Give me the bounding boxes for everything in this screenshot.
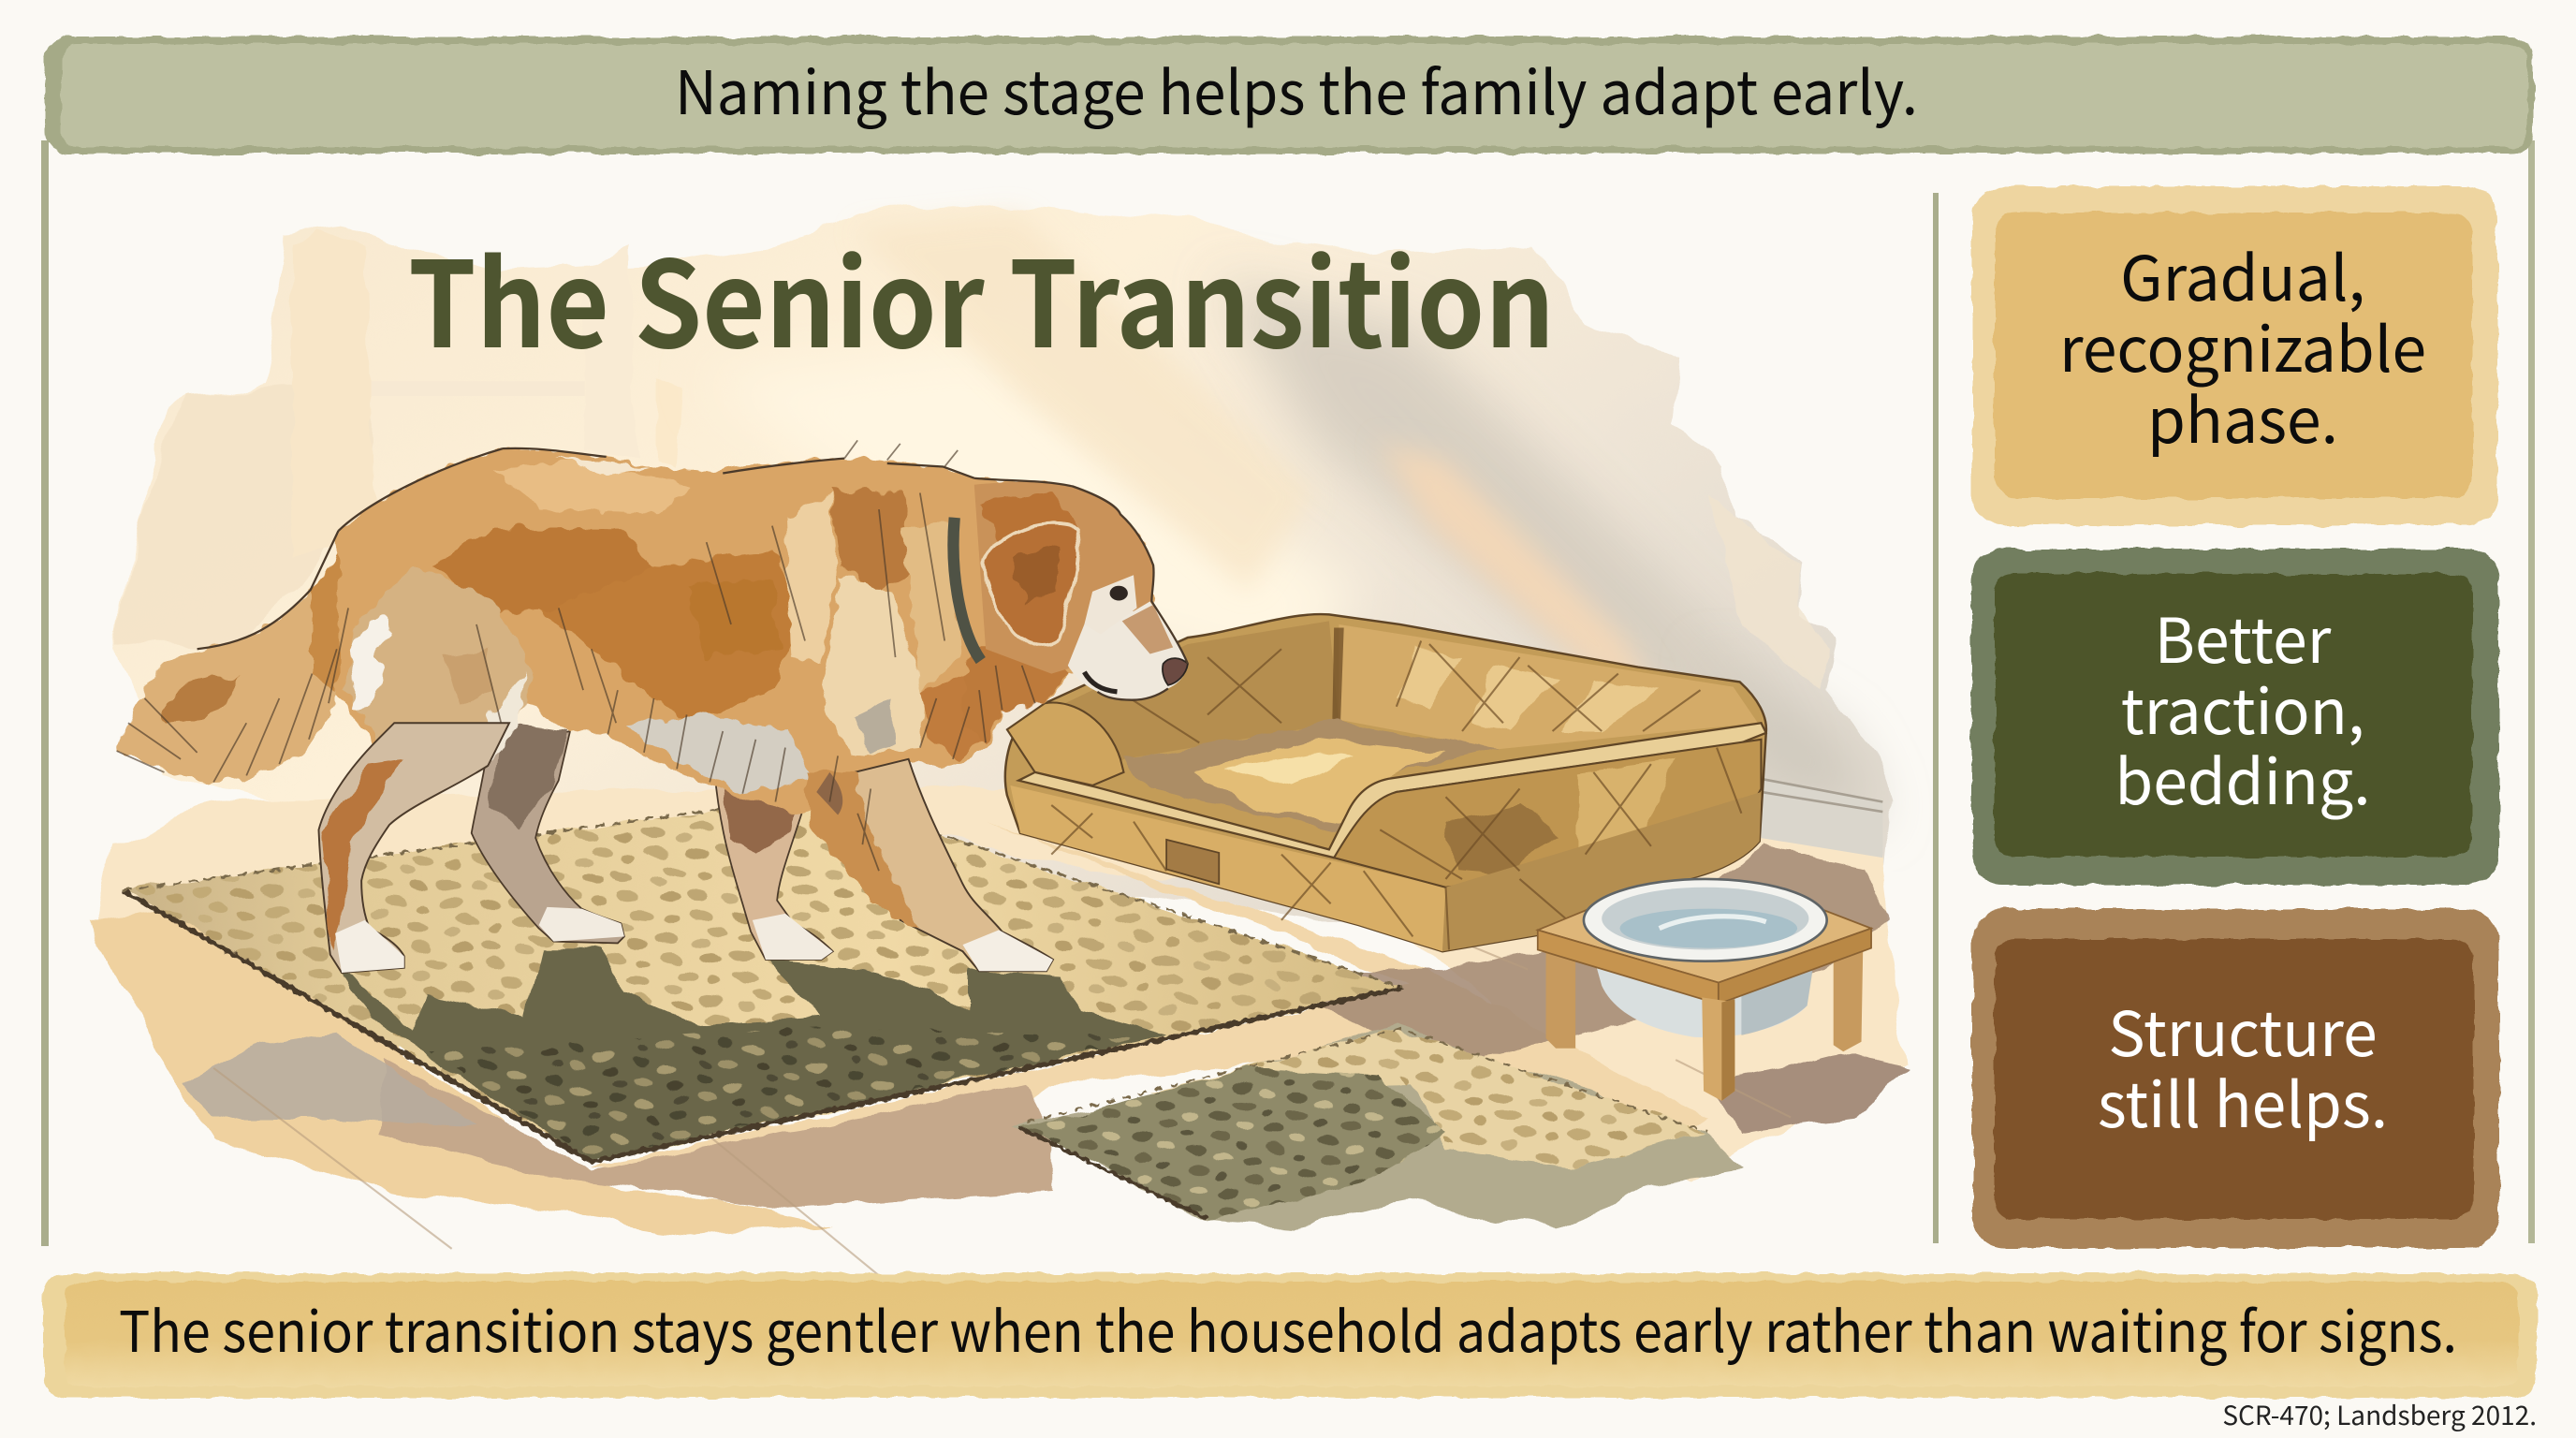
- card text: recognizable: [2059, 301, 2426, 390]
- takeaway text: The senior transition stays gentler when the household adapts early rather than waiting for signs.: [119, 1287, 2457, 1369]
- left arm: [1007, 703, 1123, 785]
- card: structure: [1972, 909, 2499, 1248]
- bed label tag: [1166, 840, 1219, 884]
- muzzle: [1068, 601, 1188, 700]
- right bolster: [1334, 740, 1761, 888]
- rear thigh: [345, 567, 534, 772]
- neck mane: [961, 649, 1070, 742]
- bowl body: [1590, 945, 1815, 1037]
- far front leg: [714, 772, 833, 960]
- background watercolor wash: [113, 205, 1889, 920]
- head: [974, 482, 1153, 674]
- nose: [1163, 658, 1188, 685]
- source citation: SCR-470; Landsberg 2012.: [2222, 1396, 2537, 1433]
- wall baseboard: [1761, 779, 1882, 858]
- eye: [1110, 586, 1128, 600]
- rug: main: [124, 795, 1403, 1162]
- header banner: [45, 37, 2533, 154]
- tail: [117, 559, 370, 782]
- bowl rim and water: [1584, 879, 1827, 961]
- front rim: [1018, 723, 1766, 858]
- card text: phase.: [2147, 372, 2338, 462]
- header text: Naming the stage helps the family adapt early.: [675, 46, 1918, 132]
- stand legs: [1546, 946, 1863, 1051]
- card text: still helps.: [2098, 1056, 2388, 1146]
- bed lower back right: [1442, 792, 1761, 951]
- card text: traction,: [2121, 663, 2364, 753]
- card text: bedding.: [2115, 733, 2371, 823]
- back wall of the bed: [1051, 621, 1339, 781]
- title: The Senior Transition: [408, 210, 1555, 382]
- dog outline: [198, 448, 1188, 700]
- body colour patches: [431, 529, 657, 611]
- mouth: [1084, 672, 1117, 692]
- bottom takeaway banner: [43, 1273, 2537, 1398]
- card: gradual phase: [1972, 186, 2497, 525]
- card text: Structure: [2108, 985, 2378, 1075]
- near rear leg: [318, 723, 509, 973]
- rug: small: [1018, 1029, 1745, 1229]
- dog bed: [1005, 614, 1766, 951]
- collar: [953, 518, 981, 661]
- water bowl on stand: [1538, 879, 1871, 1101]
- stand top: [1538, 903, 1871, 983]
- floor wash: [91, 779, 1909, 1323]
- front lower panel: [1010, 785, 1445, 951]
- far rear leg: [472, 731, 624, 943]
- inner cushion: [1123, 721, 1497, 829]
- frame lines: [41, 140, 2535, 1246]
- card text: Better: [2155, 592, 2332, 682]
- card text: Gradual,: [2120, 229, 2365, 319]
- body base: [339, 448, 1153, 814]
- quilting lines: [1051, 640, 1741, 949]
- fur strokes: [117, 440, 1035, 871]
- dog: [117, 440, 1188, 973]
- illustration: senior dog scene: [91, 205, 1909, 1323]
- bed base silhouette: [1005, 614, 1766, 951]
- card: traction and bedding: [1971, 549, 2499, 885]
- ear: [985, 525, 1078, 644]
- near front leg: [838, 759, 1053, 971]
